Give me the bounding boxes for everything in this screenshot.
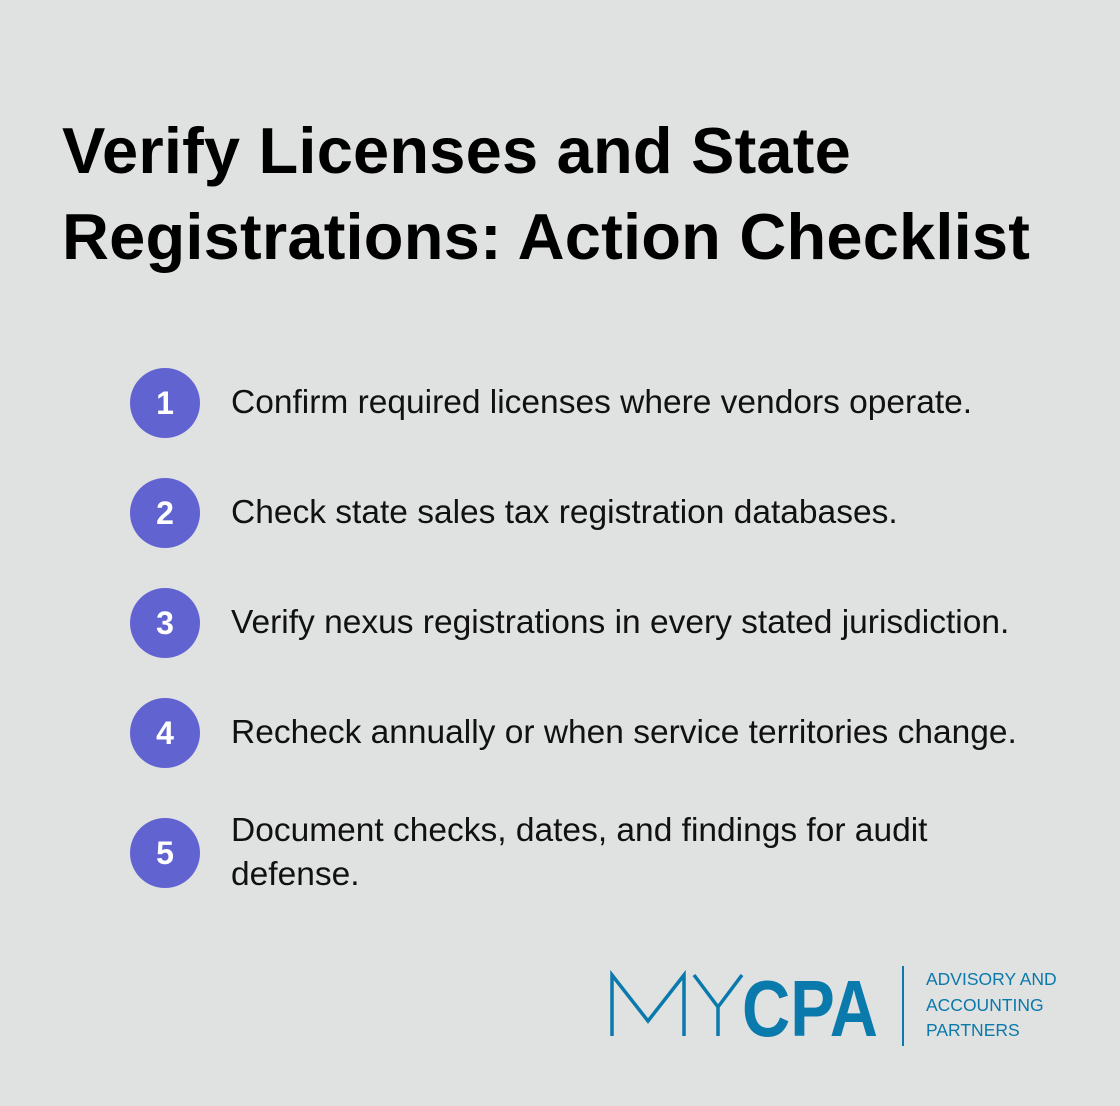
item 5: Document checks, dates, and findings for audit (231, 812, 927, 849)
logo divider (902, 966, 904, 1046)
item 5 (130, 812, 928, 893)
logo (610, 965, 1057, 1047)
checklist (130, 368, 1017, 893)
logo tagline: ACCOUNTING (926, 994, 1044, 1014)
logo tagline: PARTNERS (926, 1020, 1020, 1040)
item 1: 1 (156, 385, 174, 421)
item 4: Recheck annually or when service territories change. (231, 714, 1017, 751)
logo: MYCPA wordmark (610, 965, 878, 1047)
item 3 (130, 588, 1009, 658)
item 4: 4 (156, 715, 174, 751)
logo tagline (926, 969, 1057, 1040)
item 2: Check state sales tax registration databases. (231, 494, 898, 531)
item 5: 5 (156, 835, 174, 871)
item 2: 2 (156, 495, 174, 531)
title (62, 114, 1030, 273)
item 3: 3 (156, 605, 174, 641)
item 1: Confirm required licenses where vendors operate. (231, 384, 972, 421)
item 2 (130, 478, 898, 548)
title: Registrations: Action Checklist (62, 200, 1030, 273)
logo tagline: ADVISORY AND (926, 969, 1057, 989)
item 4 (130, 698, 1017, 768)
item 3: Verify nexus registrations in every stated jurisdiction. (231, 604, 1009, 641)
title: Verify Licenses and State (62, 114, 851, 187)
item 1 (130, 368, 972, 438)
item 5: defense. (231, 856, 360, 893)
